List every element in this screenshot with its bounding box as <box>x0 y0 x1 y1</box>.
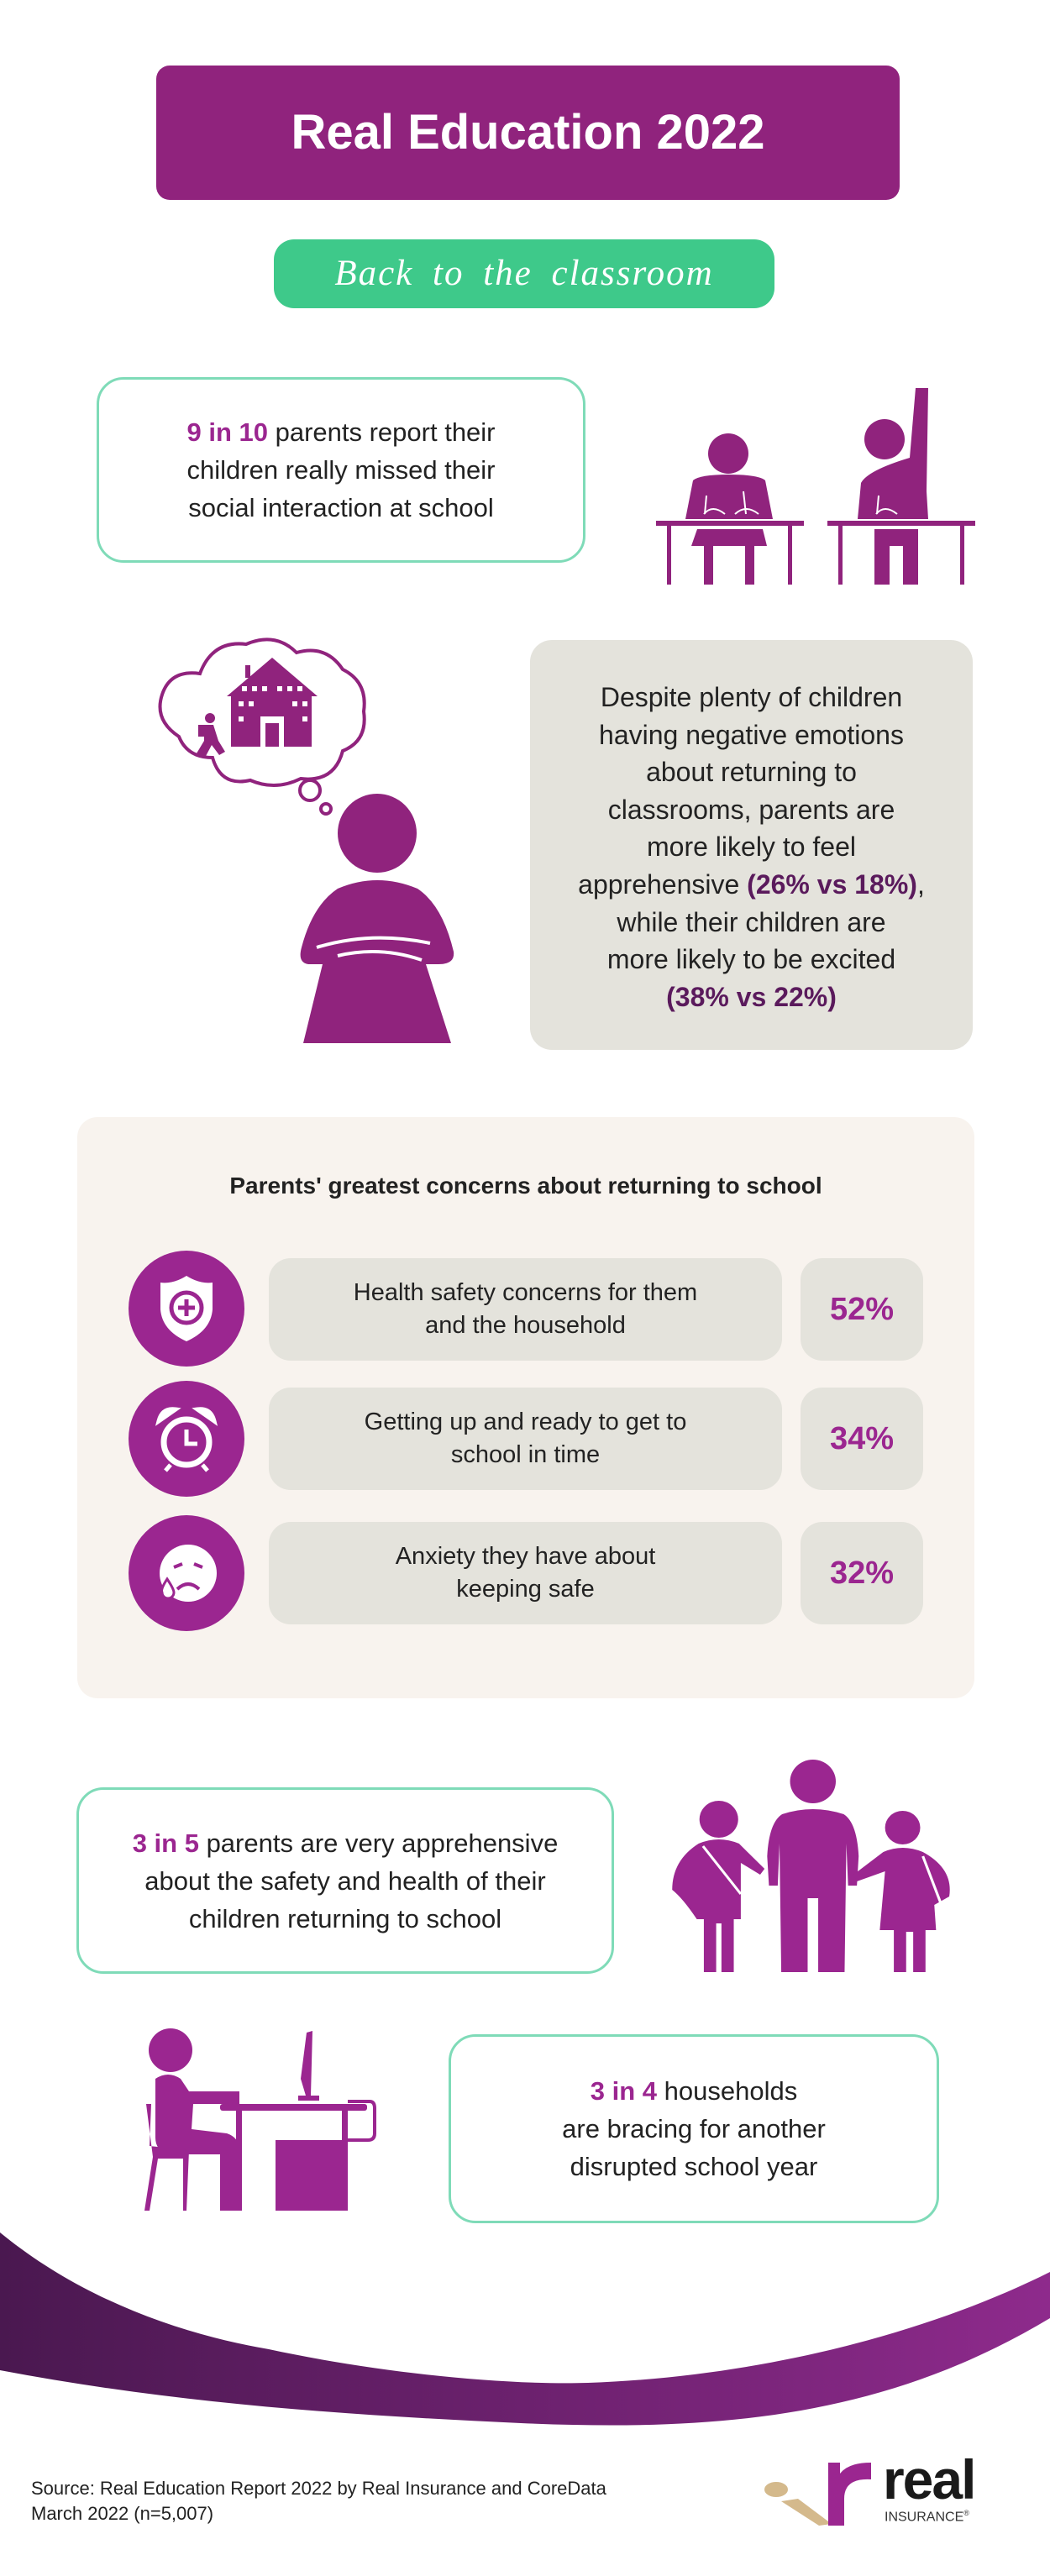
icon: shield <box>129 1251 244 1367</box>
panel: concerns <box>77 1117 974 1698</box>
icon: students at desks <box>656 388 975 585</box>
row 2: Getting up and ready to get to <box>365 1409 686 1435</box>
row 1 <box>269 1258 782 1361</box>
logo: real insurance: real <box>883 2448 974 2510</box>
source footnote: March 2022 (n=5,007) <box>31 2503 213 2524</box>
row 2: school in time <box>451 1441 600 1468</box>
decorative wave band <box>0 2232 1050 2426</box>
callout: 3 in 4: are bracing for another <box>562 2114 826 2143</box>
callout: 3 in 5: 3 in 5 parents are very apprehensive <box>133 1828 558 1858</box>
text: 32% <box>830 1556 894 1591</box>
callout: 3 in 5 <box>76 1787 614 1974</box>
icon: sad face <box>129 1515 244 1631</box>
row 3: keeping safe <box>456 1576 595 1603</box>
subtitle pill: Back to the classroom <box>334 254 714 293</box>
text block: parents vs children emotions: apprehensive (26% vs 18%), <box>578 869 925 900</box>
text block: parents vs children emotions <box>530 640 973 1050</box>
source footnote: Source: Real Education Report 2022 by Real Insurance and CoreData <box>31 2478 606 2499</box>
row 3 <box>269 1522 782 1624</box>
callout: 9 in 10 <box>97 377 585 563</box>
text block: parents vs children emotions: while their children are <box>617 907 886 937</box>
callout: 9 in 10: social interaction at school <box>188 493 494 522</box>
text block: parents vs children emotions: having negative emotions <box>599 720 904 750</box>
text block: parents vs children emotions: (38% vs 22%) <box>666 982 837 1012</box>
row 1: Health safety concerns for them <box>354 1279 697 1306</box>
text: 52% <box>830 1292 894 1327</box>
text block: parents vs children emotions: more likely to be excited <box>607 944 895 974</box>
row 3: Anxiety they have about <box>396 1543 655 1570</box>
callout: 3 in 5: children returning to school <box>189 1903 501 1933</box>
row 1: and the household <box>425 1312 626 1339</box>
icon: family <box>672 1760 950 1972</box>
logo: real insurance <box>764 2448 974 2526</box>
subtitle pill <box>274 239 774 308</box>
text block: parents vs children emotions: more likely to feel <box>647 832 856 862</box>
logo: real insurance: INSURANCE® <box>885 2509 969 2524</box>
callout: 3 in 5: about the safety and health of their <box>144 1866 546 1895</box>
icon: alarm clock <box>129 1381 244 1497</box>
text block: parents vs children emotions: about returning to <box>646 757 857 787</box>
icon: thinking person <box>301 794 454 1043</box>
callout: 9 in 10: children really missed their <box>186 455 495 485</box>
row 2 <box>269 1388 782 1490</box>
text: 34% <box>830 1421 894 1456</box>
callout: 3 in 4 <box>449 2034 939 2223</box>
callout: 3 in 4: disrupted school year <box>570 2152 817 2181</box>
heading: Parents' greatest concerns about returning to school <box>229 1173 822 1199</box>
text block: parents vs children emotions: classrooms, parents are <box>608 795 895 825</box>
title: Real Education 2022 <box>291 105 765 160</box>
callout: 3 in 4: 3 in 4 households <box>591 2076 797 2106</box>
text block: parents vs children emotions: Despite plenty of children <box>601 682 902 712</box>
icon: person at desk <box>144 2028 376 2211</box>
title <box>156 66 900 200</box>
source footnote <box>31 2478 606 2524</box>
icon: thought cloud with school <box>158 637 366 816</box>
callout: 9 in 10: 9 in 10 parents report their <box>186 417 496 447</box>
